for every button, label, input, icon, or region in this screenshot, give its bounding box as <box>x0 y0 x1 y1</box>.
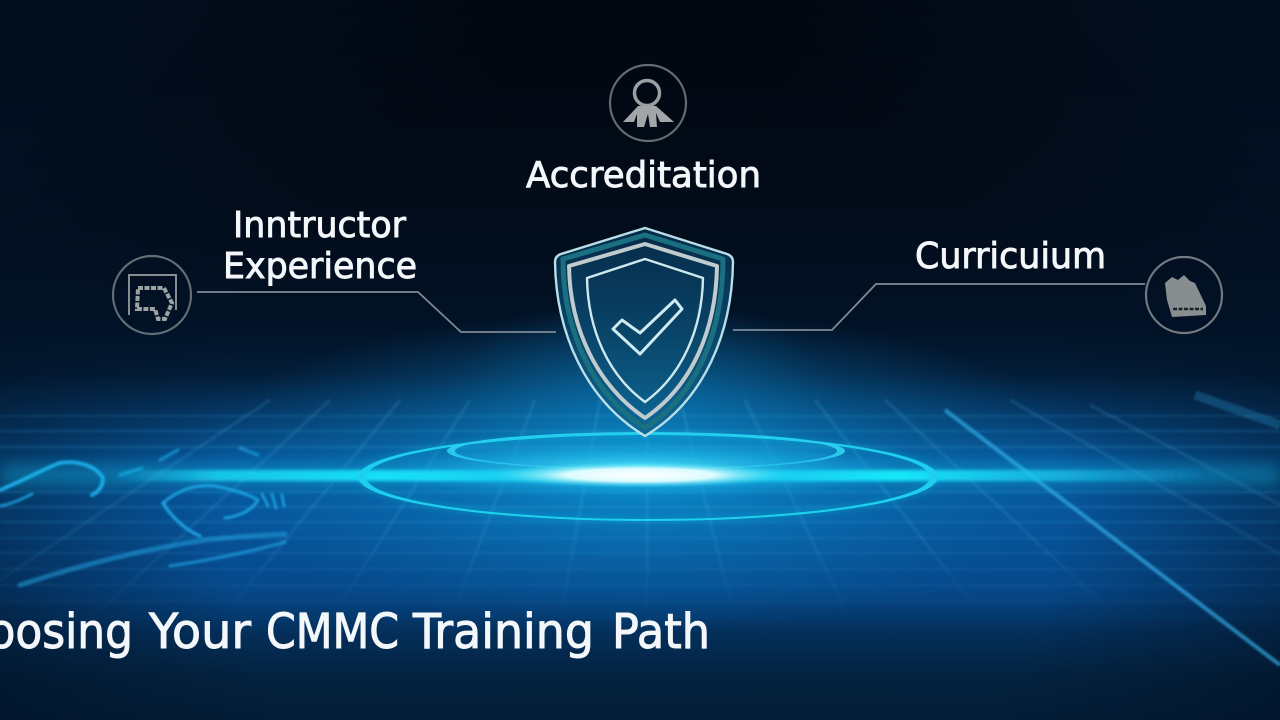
icon: ribbon badge <box>610 65 686 141</box>
glowing platform rings <box>358 432 938 521</box>
shield with check mark <box>555 228 733 436</box>
curriculum node <box>915 236 1222 333</box>
connector lines <box>197 284 1145 332</box>
holographic hand outline at lower left <box>0 448 285 585</box>
label: instructor experience <box>223 205 417 287</box>
title: Your <box>148 604 251 660</box>
shield teal band <box>563 235 723 428</box>
outer ring crescent <box>358 433 938 521</box>
title: CMMC <box>266 604 399 660</box>
title: Training <box>412 604 594 660</box>
label: accreditation: Accreditation <box>526 155 761 196</box>
shield middle ring <box>569 244 717 418</box>
accreditation node <box>526 65 761 196</box>
inner ring crescent <box>447 432 845 470</box>
title: Path <box>612 604 710 660</box>
check mark <box>613 300 682 354</box>
icon: curriculum stack <box>1146 257 1222 333</box>
label: instructor experience: Inntructor <box>233 205 406 246</box>
perspective grid floor <box>0 395 1280 665</box>
shield inner ring <box>587 259 703 402</box>
light beam <box>0 466 1280 484</box>
shield outer edge <box>555 228 733 436</box>
instructor experience node <box>113 205 417 334</box>
label: curriculum: Curricuium <box>915 236 1106 277</box>
icon: classroom board <box>113 256 191 334</box>
label: instructor experience: Experience <box>223 246 417 287</box>
